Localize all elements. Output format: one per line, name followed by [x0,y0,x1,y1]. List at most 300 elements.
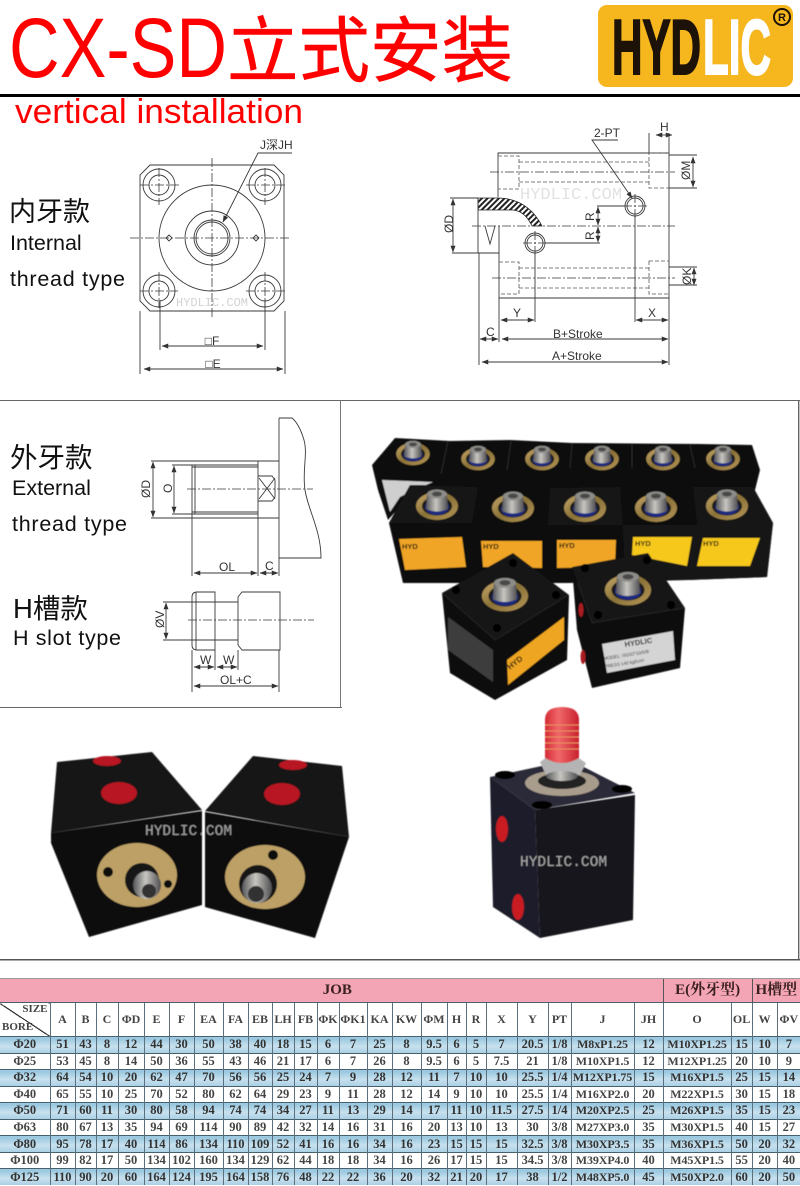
drawing: H slot: W [223,653,235,667]
specification table: 6 [453,1037,460,1051]
specification table: 20 [758,1137,771,1151]
drawing: internal thread section view: H [660,120,669,134]
specification table: 16 [322,1137,334,1151]
specification table: 11 [347,1087,359,1101]
specification table: 55 [79,1087,92,1101]
specification table: 90 [229,1120,242,1134]
specification table: 134 [199,1137,218,1151]
specification table: 70 [202,1070,215,1084]
specification table: 23 [783,1103,795,1117]
specification table: 10 [495,1087,508,1101]
specification table: 17 [450,1153,463,1167]
specification table: ΦM [423,1012,445,1026]
specification table: 109 [251,1137,269,1151]
specification table: 65 [56,1087,69,1101]
specification table: Φ50 [13,1103,36,1117]
specification table: 32 [783,1137,795,1151]
specification table: EA [200,1012,217,1026]
specification table: 20 [101,1170,113,1184]
specification table: 1/8 [552,1054,567,1068]
specification table: 50 [735,1137,748,1151]
specification table: 53 [56,1054,69,1068]
specification table: 12 [642,1054,655,1068]
drawing: H slot: ØV [153,611,167,628]
specification table: 48 [299,1170,312,1184]
specification table: 129 [251,1153,269,1167]
specification table: 56 [254,1070,266,1084]
specification table: KA [370,1012,388,1026]
specification table: 94 [202,1103,215,1117]
specification table: 67 [79,1120,92,1134]
specification table: W [759,1012,771,1026]
specification table: 82 [79,1153,92,1167]
specification table: 164 [147,1170,166,1184]
specification table: 36 [373,1170,386,1184]
specification table: 16 [347,1120,359,1134]
specification table: 1/4 [552,1087,567,1101]
specification table: 8 [104,1054,110,1068]
specification table: 40 [125,1137,137,1151]
specification table: 40 [735,1120,748,1134]
specification table: 10 [470,1087,482,1101]
specification table: Φ25 [13,1054,36,1068]
logo: HYD [612,3,701,91]
specification table: M16XP1.5 [670,1070,724,1084]
specification table: M36XP1.5 [670,1137,724,1151]
back row of cylinders [372,438,760,520]
specification table: JOB [323,982,352,998]
specification table: Φ80 [13,1137,36,1151]
specification table [0,978,800,1185]
specification table: 195 [199,1170,218,1184]
label: H slot type: H slot type [13,626,121,650]
specification table: Φ20 [13,1037,36,1051]
specification table: M20XP2.5 [576,1103,629,1117]
specification table: R [472,1012,480,1026]
specification table: 80 [150,1103,163,1117]
drawing: internal thread section view: X [648,306,656,320]
specification table: 15 [299,1037,312,1051]
specification table: 11 [428,1070,440,1084]
drawing: H slot: OL+C [220,673,252,687]
label: H slot type [13,593,121,650]
specification table: 124 [172,1170,191,1184]
specification table: B [81,1012,90,1026]
specification table: 1/4 [552,1103,567,1117]
specification table: 12 [125,1037,137,1051]
specification table: 30 [526,1120,539,1134]
front row of cylinders: HYD [703,539,719,548]
specification table: 11 [451,1103,462,1117]
specification table: 10 [101,1087,113,1101]
specification table: 64 [254,1087,266,1101]
specification table: 10 [470,1120,482,1134]
specification table: 27 [783,1120,795,1134]
specification table: A [58,1012,67,1026]
front row of cylinders: HYD [559,541,575,550]
specification table: 44 [150,1037,163,1051]
specification table: 46 [254,1054,266,1068]
specification table: 60 [735,1170,748,1184]
specification table: 40 [642,1153,655,1167]
drawing: internal thread section view: A+Stroke [552,349,602,363]
specification table: 36 [175,1054,188,1068]
drawing: internal thread front view: □F [205,334,219,348]
specification table: 3/8 [552,1153,567,1167]
drawing: internal thread section view: ØK [680,268,694,285]
specification table: 34.5 [522,1153,543,1167]
specification table: 25 [277,1070,289,1084]
specification table: 69 [175,1120,188,1134]
specification table: 62 [229,1087,242,1101]
specification table: Y [528,1012,537,1026]
specification table: 11 [101,1103,113,1117]
specification table: 17 [101,1153,113,1167]
drawing: external thread: C [265,559,274,573]
photo: two black cylinders [51,752,349,938]
specification table: 3/8 [552,1120,567,1134]
specification table: 52 [277,1137,289,1151]
specification table: 62 [277,1153,289,1167]
specification table: M30XP3.5 [576,1137,629,1151]
title: CX-SD [9,1,227,95]
specification table: 14 [125,1054,137,1068]
specification table: M10XP1.25 [667,1037,727,1051]
drawing: internal thread section view: R [583,212,597,221]
drawing: internal thread front view: HYDLIC.COM [176,296,248,310]
specification table: J [600,1012,606,1026]
specification table: 160 [199,1153,218,1167]
specification table: 17 [428,1103,440,1117]
specification table: 7 [453,1070,460,1084]
specification table: 13 [101,1120,113,1134]
specification table: 34 [277,1103,289,1117]
specification table: 30 [125,1103,137,1117]
specification table: ΦK [318,1012,338,1026]
specification table: 42 [277,1120,289,1134]
specification table: Φ100 [10,1153,39,1167]
specification table: 9 [350,1070,356,1084]
specification table: 14 [400,1103,413,1117]
specification table: 27 [299,1103,312,1117]
specification table: 134 [226,1153,245,1167]
specification table: 21 [526,1054,539,1068]
specification table: 5 [473,1054,479,1068]
specification table: 13 [347,1103,359,1117]
label: internal thread type: thread type [10,267,125,291]
label: H slot type: H槽款 [13,593,88,624]
specification table: M16XP2.0 [576,1087,629,1101]
specification table: 10 [101,1070,113,1084]
specification table: 1/4 [552,1070,567,1084]
specification table: 7 [350,1054,356,1068]
specification table: 15 [470,1137,482,1151]
specification table: 15 [758,1070,771,1084]
drawing: internal thread section view: 2-PT [594,126,621,140]
specification table: 70 [150,1087,163,1101]
specification table: X [497,1012,506,1026]
specification table: 25 [735,1070,748,1084]
specification table: Φ125 [10,1170,39,1184]
specification table: 86 [175,1137,188,1151]
drawing: external thread: O [161,484,175,493]
specification table: 20.5 [522,1037,543,1051]
specification table: 8 [403,1054,410,1068]
specification table: 45 [642,1170,655,1184]
specification table: M39XP4.0 [576,1153,629,1167]
specification table: 1/2 [552,1170,567,1184]
specification table: 15 [758,1087,771,1101]
specification table: 60 [125,1170,137,1184]
specification table: 5 [473,1037,479,1051]
specification table: 15 [450,1137,463,1151]
specification table: F [178,1012,185,1026]
specification table: 9.5 [426,1054,442,1068]
specification table: 14 [322,1120,334,1134]
specification table: 50 [150,1054,163,1068]
specification table: 78 [79,1137,92,1151]
specification table: 99 [56,1153,69,1167]
specification table: 56 [229,1070,242,1084]
front right cube: HYDLIC [624,636,653,649]
specification table: LH [274,1012,292,1026]
front row of cylinders: HYD [402,542,418,551]
specification table: 10 [758,1054,771,1068]
specification table: 9 [453,1087,460,1101]
specification table: BORE [2,1020,33,1032]
specification table: C [103,1012,111,1026]
specification table: 20 [470,1170,482,1184]
specification table: 52 [175,1087,188,1101]
specification table: 64 [56,1070,69,1084]
specification table: 16 [400,1153,413,1167]
label: internal thread type: 内牙款 [9,197,90,227]
specification table: 44 [299,1153,312,1167]
specification table: M12XP1.75 [573,1070,632,1084]
specification table: 23 [428,1137,440,1151]
specification table: 21 [450,1170,463,1184]
specification table: 9 [325,1087,331,1101]
front right cube [572,553,685,688]
specification table: M10XP1.5 [576,1054,629,1068]
specification table: 38 [526,1170,539,1184]
photo: cylinder with red cap: HYDLIC.COM [520,855,607,871]
front row of cylinders: HYD [635,539,651,548]
specification table: 34 [373,1137,386,1151]
drawing: internal thread section view: ØM [679,161,693,180]
specification table: 102 [172,1153,191,1167]
specification table: FB [298,1012,313,1026]
specification table: 40 [783,1153,795,1167]
specification table: 7 [350,1037,356,1051]
specification table: 40 [254,1037,266,1051]
label: external thread type: External [12,476,91,500]
specification table: 43 [79,1037,92,1051]
label: internal thread type: Internal [10,231,82,255]
specification table: 55 [202,1054,215,1068]
specification table: 38 [229,1037,242,1051]
specification table: 7 [786,1037,792,1051]
specification table: 50 [202,1037,215,1051]
specification table: 90 [79,1170,92,1184]
subtitle: vertical installation [15,93,303,131]
specification table: 16 [347,1137,359,1151]
specification table: 50 [783,1170,795,1184]
front right cube: MODEL: ISD32*10/5/B [603,649,649,661]
specification table: 18 [783,1087,795,1101]
specification table: 12 [400,1087,413,1101]
front left cube: HYD [506,654,525,672]
specification table: KW [396,1012,417,1026]
front row of cylinders: HYD [483,542,499,551]
specification table: 15 [758,1103,771,1117]
specification table: 134 [147,1153,166,1167]
specification table: 58 [175,1103,188,1117]
specification table: 6 [325,1054,331,1068]
specification table: 25 [373,1037,386,1051]
specification table: E(外牙型) [675,982,740,998]
specification table: 16 [400,1137,413,1151]
drawing: external thread: OL [219,560,235,574]
specification table: 76 [277,1170,289,1184]
specification table: 25.5 [522,1070,543,1084]
specification table: 31 [373,1120,386,1134]
specification table: 21 [277,1054,289,1068]
drawing: H slot [153,592,314,692]
specification table: 16 [400,1120,413,1134]
specification table: 20 [400,1170,413,1184]
specification table: 10 [495,1070,508,1084]
specification table: 15 [642,1070,655,1084]
specification table: 14 [783,1070,795,1084]
specification table: 10 [470,1103,482,1117]
specification table: 51 [56,1037,69,1051]
specification table: H [452,1012,461,1026]
specification table: 110 [226,1137,245,1151]
specification table: 11 [322,1103,334,1117]
specification table: 7.5 [494,1054,509,1068]
specification table: 74 [229,1103,242,1117]
specification table: 10 [758,1037,771,1051]
specification table: M26XP1.5 [670,1103,724,1117]
photo: cylinder group [372,438,773,700]
specification table: ΦD [122,1012,140,1026]
specification table: Φ63 [13,1120,36,1134]
specification table: JH [641,1012,656,1026]
specification table: 80 [56,1120,69,1134]
specification table: 20 [758,1170,771,1184]
specification table: 1/8 [552,1037,567,1051]
drawing: internal thread section view: ØD [442,215,456,233]
front right cube: PRESS 140 kgf/cm² [604,658,645,669]
specification table: 25.5 [522,1087,543,1101]
specification table: 20 [642,1087,655,1101]
specification table: 17 [495,1170,508,1184]
specification table: 7 [498,1037,505,1051]
specification table: 41 [299,1137,312,1151]
logo: R [778,12,786,24]
specification table: 80 [202,1087,215,1101]
label: external thread type [10,442,127,536]
specification table: 15 [758,1120,771,1134]
label: external thread type: 外牙款 [10,442,92,473]
specification table: FA [228,1012,243,1026]
specification table: 11.5 [491,1103,512,1117]
specification table: 114 [147,1137,166,1151]
specification table: 34 [373,1153,386,1167]
specification table: 9.5 [426,1037,442,1051]
drawing: internal thread section view: R [583,231,597,240]
label: internal thread type [9,197,125,291]
specification table: 17 [299,1054,312,1068]
specification table: 20 [125,1070,137,1084]
specification table: M45XP1.5 [670,1153,724,1167]
specification table: Φ40 [13,1087,36,1101]
specification table: EB [252,1012,268,1026]
specification table: 12 [400,1070,413,1084]
specification table: 14 [428,1087,440,1101]
specification table: 3/8 [552,1137,567,1151]
drawing: internal thread section view [442,120,697,365]
specification table: 22 [322,1170,334,1184]
specification table: 20 [735,1054,748,1068]
specification table: 25 [125,1087,137,1101]
specification table: 10 [470,1070,482,1084]
specification table: ΦK1 [340,1012,366,1026]
drawing: internal thread front view [130,138,293,374]
specification table: 89 [254,1120,266,1134]
specification table: 110 [53,1170,72,1184]
specification table: 35 [125,1120,137,1134]
specification table: 8 [403,1037,410,1051]
specification table: 32.5 [522,1137,543,1151]
specification table: 26 [428,1153,440,1167]
specification table: 25 [642,1103,655,1117]
specification table: 30 [735,1087,748,1101]
specification table: 35 [642,1137,655,1151]
specification table: 18 [322,1153,334,1167]
photo: cylinder with red cap [490,707,635,938]
specification table: 95 [56,1137,69,1151]
photo: two black cylinders: HYDLIC.COM [145,824,232,840]
drawing: internal thread front view: J深JH [260,138,293,152]
specification table: M8xP1.25 [577,1037,628,1051]
specification table: 30 [175,1037,188,1051]
specification table: 28 [373,1087,386,1101]
specification table: 27.5 [522,1103,543,1117]
specification table: 26 [373,1054,386,1068]
specification table: 50 [125,1153,137,1167]
specification table: 60 [79,1103,92,1117]
specification table: M27XP3.0 [576,1120,629,1134]
specification table: 13 [495,1120,508,1134]
specification table: 22 [347,1170,359,1184]
specification table: OL [733,1012,750,1026]
specification table: 43 [229,1054,242,1068]
specification table: PT [552,1012,567,1026]
specification table: Φ32 [13,1070,36,1084]
specification table: ΦV [780,1012,798,1026]
specification table: M50XP2.0 [670,1170,724,1184]
specification table: 18 [277,1037,289,1051]
specification table: 23 [299,1087,312,1101]
specification table: 9 [786,1054,792,1068]
drawing: external thread [139,418,321,576]
specification table: M12XP1.25 [667,1054,727,1068]
specification table: 55 [735,1153,748,1167]
drawing: internal thread section view: Y [513,306,521,320]
specification table: 71 [56,1103,69,1117]
